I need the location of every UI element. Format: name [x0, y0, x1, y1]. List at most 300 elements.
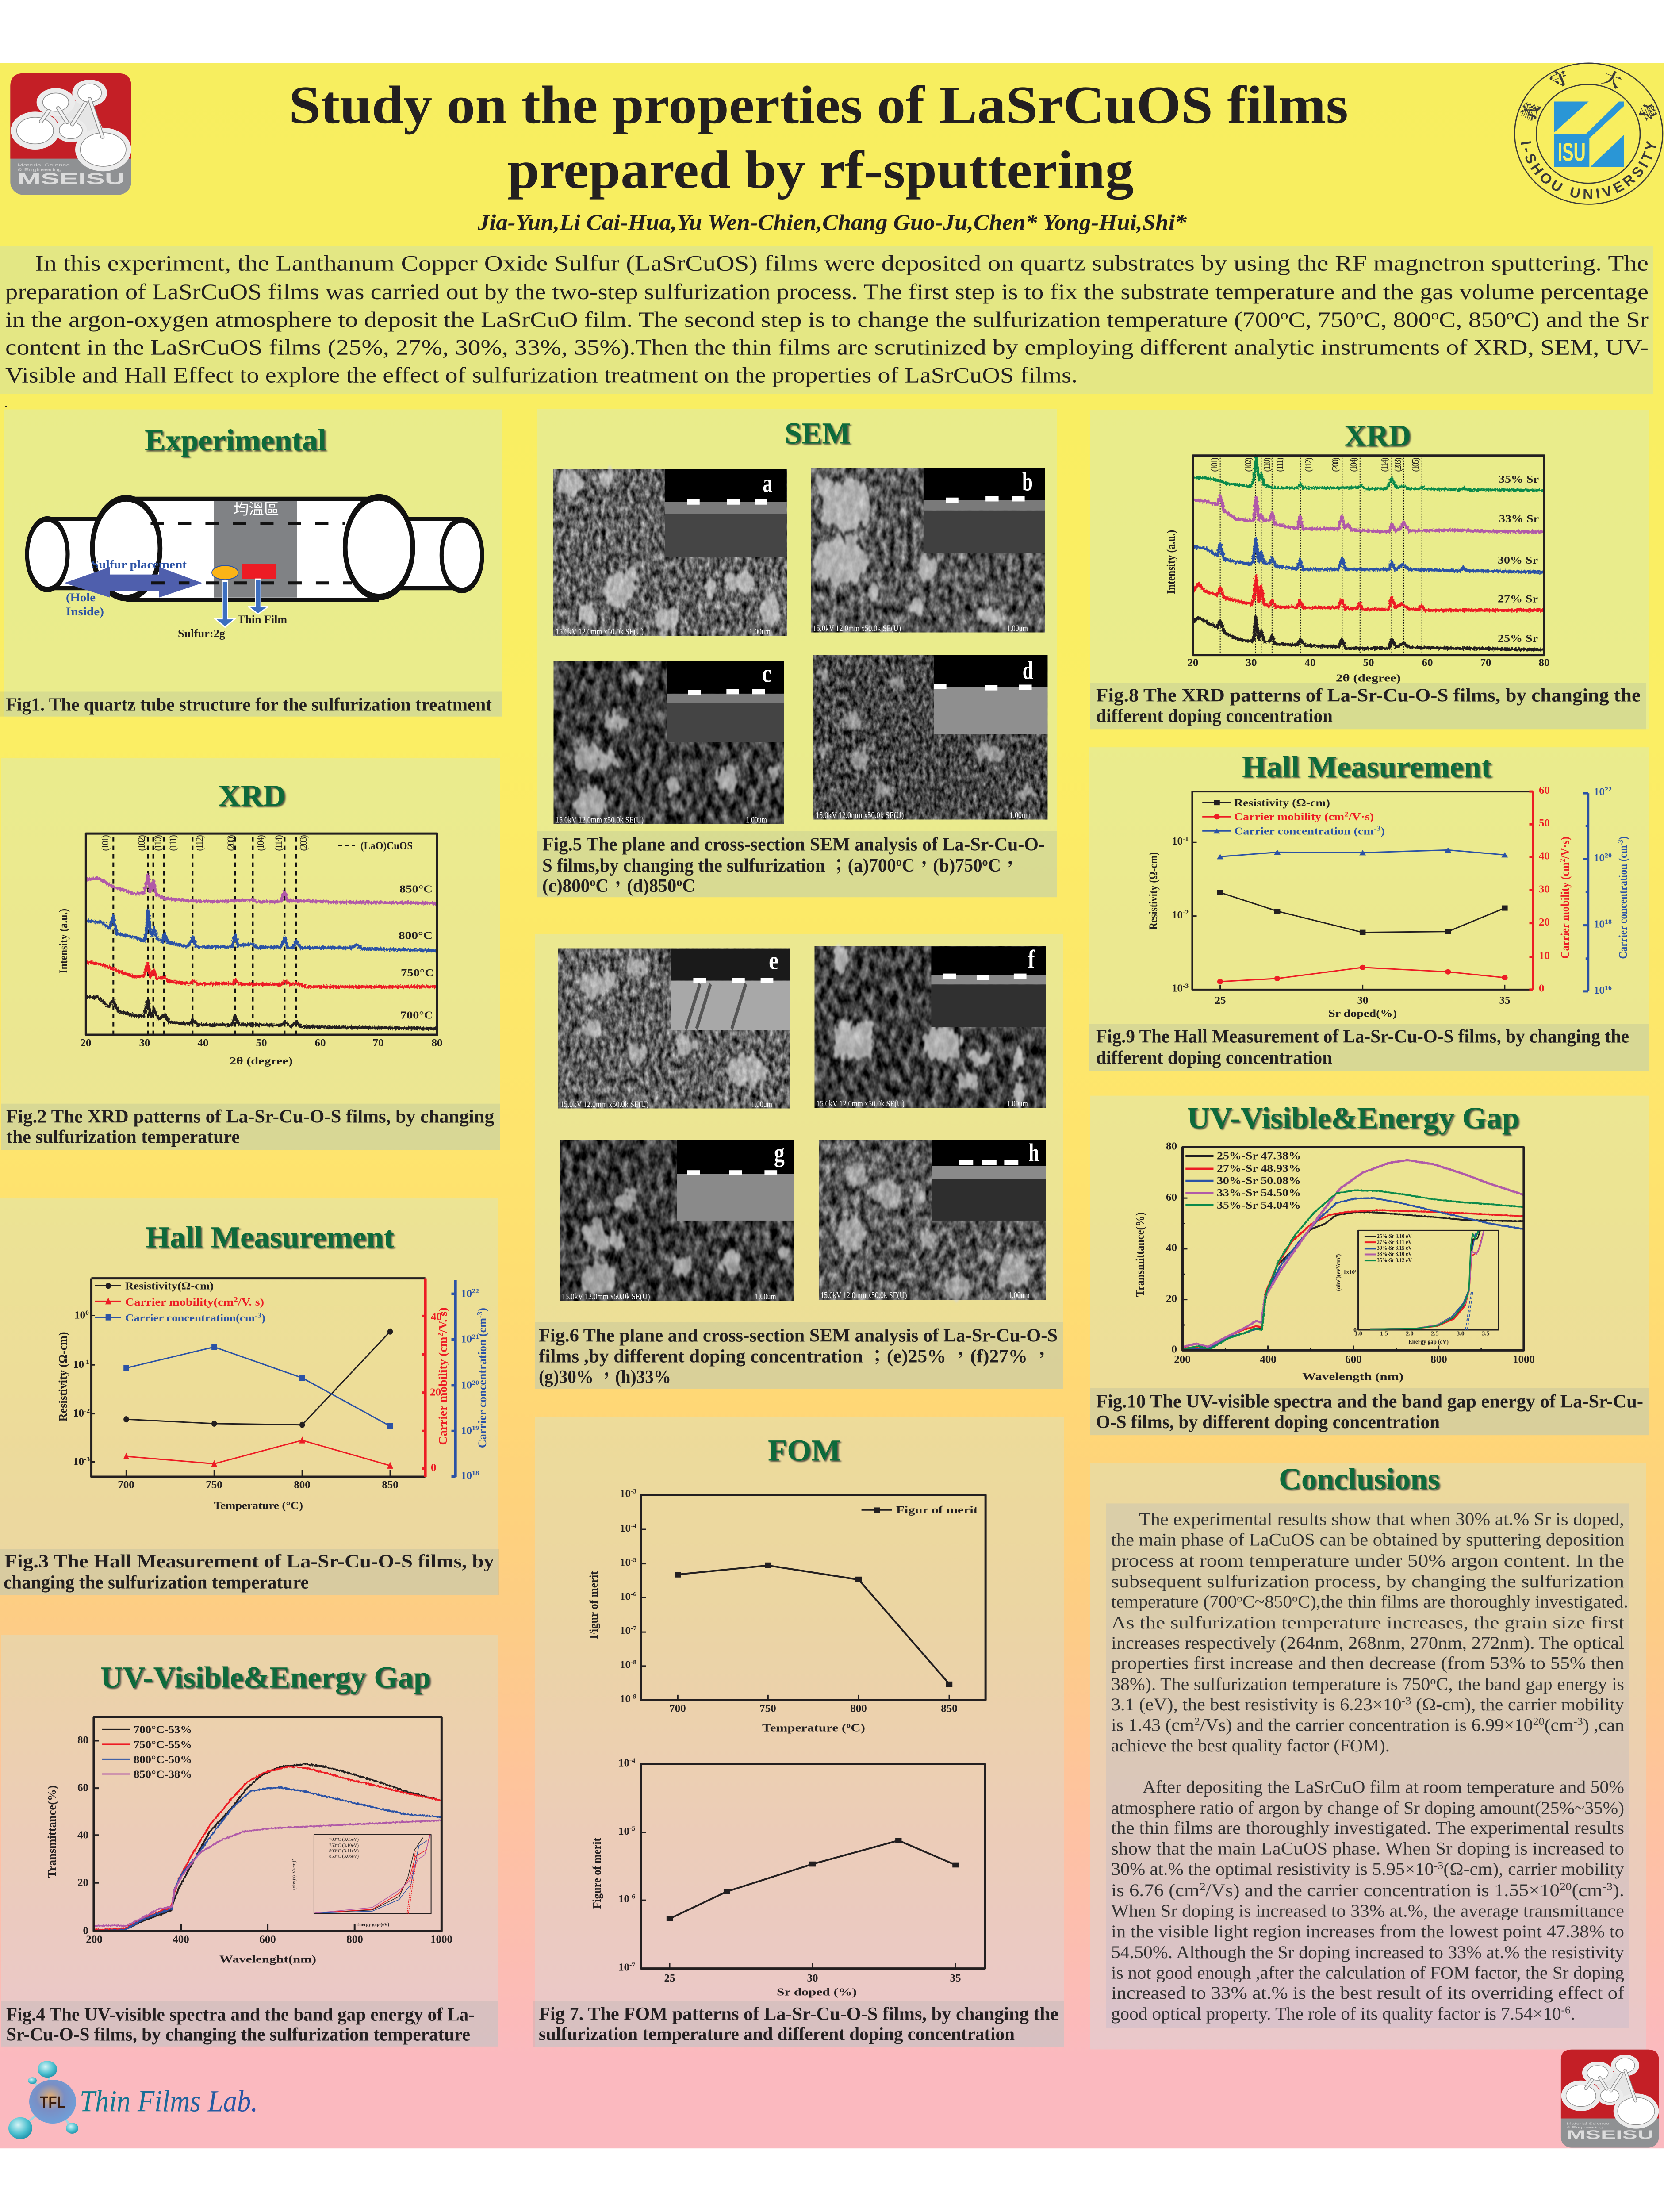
- chart: Hall by temperature: 1: [84, 1359, 89, 1366]
- chart: Hall by temperature: Resistivity(Ω-cm): [125, 1280, 214, 1292]
- chart: UV-visible by temperature: 750°C (3.10eV): [329, 1843, 359, 1848]
- chart: XRD patterns by temperature: (114): [273, 835, 284, 851]
- image: SEM b: [811, 468, 1045, 633]
- chart: Hall by temperature: 750: [206, 1479, 222, 1491]
- text block: conclusions body: 54.50%. Although the Sr doping increased to 33% at.% the resistivity: [1111, 1942, 1625, 1962]
- chart: Hall by temperature: 10: [461, 1288, 472, 1300]
- chart: Hall by doping: 10: [1172, 909, 1183, 921]
- caption: Fig 10: Fig.10 The UV-visible spectra and the band gap energy of La-Sr-Cu-: [1096, 1391, 1643, 1412]
- chart: XRD patterns by doping: (104): [1349, 457, 1359, 472]
- image: SEM h: h: [1028, 1139, 1039, 1167]
- diagram: quartz tube: Sulfur:2g: [178, 627, 225, 640]
- image: SEM e: e: [769, 947, 778, 975]
- chart: XRD patterns by doping: 20: [1188, 657, 1198, 668]
- chart: XRD patterns by doping: (111): [1275, 457, 1285, 472]
- chart: FOM by temperature: 10: [620, 1523, 631, 1534]
- image: SEM c: c: [762, 660, 771, 688]
- text block: conclusions body: 20: [1533, 1716, 1545, 1728]
- chart: Hall by doping: [1147, 784, 1629, 1019]
- chart: Hall by temperature: 850: [382, 1479, 399, 1491]
- text block: conclusions body: ) ,can: [1583, 1715, 1624, 1735]
- chart: FOM by temperature: 700: [669, 1703, 686, 1715]
- chart: Hall by temperature: 10: [461, 1379, 472, 1391]
- heading: Experimental: Experimental: [145, 423, 326, 457]
- chart: XRD patterns by doping: 33% Sr: [1499, 513, 1539, 525]
- text block: conclusions body: increases respectively (264nm, 268nm, 270nm, 272nm). The optical: [1111, 1633, 1624, 1653]
- image: SEM f: [815, 945, 1046, 1109]
- text block: conclusions body: the thin films are thoroughly investigated. The experimental results: [1111, 1818, 1624, 1838]
- chart: UV-visible by doping: 33%-Sr 54.50%: [1217, 1187, 1301, 1199]
- chart: UV-visible by doping: Energy gap (eV): [1408, 1338, 1449, 1345]
- chart: FOM by doping: 30: [807, 1973, 818, 1984]
- chart: Hall by temperature: 10: [74, 1310, 85, 1321]
- panel: FOM: [533, 1417, 1064, 2047]
- text block: conclusions body: o: [1292, 1592, 1298, 1604]
- logo: MSEISU bottom right: [1561, 2050, 1659, 2148]
- chart: XRD patterns by temperature: (101): [100, 835, 111, 851]
- chart: Hall by doping: /V·s): [1559, 837, 1572, 859]
- chart: Hall by doping: 35: [1499, 995, 1510, 1006]
- panel: abstract: C, 800: [1364, 307, 1431, 332]
- chart: UV-visible by doping: 27%-Sr 3.11 eV: [1377, 1239, 1412, 1245]
- chart: XRD patterns by temperature: Intensity (a.u.): [57, 909, 70, 974]
- image: SEM a: [553, 469, 787, 637]
- chart: FOM by doping: -4: [629, 1757, 635, 1764]
- panel: abstract: C, 850: [1439, 307, 1507, 332]
- caption: Fig 5: S films,by changing the sulfurization ；(a)700: [542, 856, 923, 876]
- chart: XRD patterns by temperature: 40: [198, 1037, 208, 1049]
- chart: XRD patterns by doping: (112): [1304, 457, 1314, 472]
- chart: XRD patterns by doping: 70: [1480, 657, 1491, 668]
- image: SEM f: 1.00um: [1007, 1098, 1028, 1109]
- text block: conclusions body: 30% at.% the optimal resistivity is 5.95×10: [1111, 1859, 1433, 1879]
- chart: Hall by doping: 30: [1539, 883, 1550, 895]
- caption: Fig 5: C: [682, 876, 695, 896]
- chart: Hall by doping: -2: [1183, 909, 1189, 916]
- chart: FOM by temperature: Figur of merit: [587, 1571, 600, 1639]
- chart: Hall by doping: 10: [1172, 836, 1183, 847]
- panel: UV-Visible temperature: [1, 1635, 498, 2047]
- text block: conclusions body: C, the band gap energy is: [1436, 1674, 1624, 1694]
- text block: conclusions body: -3: [1573, 1716, 1583, 1728]
- image: SEM h: [819, 1139, 1046, 1300]
- caption: Fig 9: Fig.9 The Hall Measurement of La-Sr-Cu-O-S films, by changing the: [1096, 1027, 1629, 1047]
- chart: Hall by temperature: 800: [294, 1479, 311, 1491]
- caption: Fig 6: films ,by different doping concentration ；(e)25% ，(f)27% ，: [539, 1346, 1051, 1367]
- text block: conclusions body: After depositing the LaSrCuO film at room temperature and 50%: [1143, 1777, 1624, 1797]
- text block: conclusions body: -3: [1603, 1881, 1613, 1893]
- caption: Fig 2: the sulfurization temperature: [6, 1127, 240, 1147]
- text block: conclusions body: subsequent sulfurization process, by changing the sulfurization: [1111, 1571, 1624, 1591]
- chart: FOM by temperature: -4: [631, 1522, 636, 1530]
- image: SEM c: 1.00um: [746, 814, 767, 825]
- chart: XRD patterns by doping: (102): [1244, 457, 1254, 472]
- chart: UV-visible by doping: 30%-Sr 3.15 eV: [1377, 1244, 1412, 1251]
- chart: XRD patterns by doping: 80: [1539, 657, 1549, 668]
- chart: UV-visible by temperature: Wavelenght(nm): [219, 1953, 316, 1965]
- caption: Fig 6: Fig.6 The plane and cross-section SEM analysis of La-Sr-Cu-O-S: [539, 1326, 1058, 1346]
- chart: FOM by temperature: -7: [631, 1624, 636, 1632]
- chart: UV-visible by doping: 25%-Sr 47.38%: [1217, 1150, 1301, 1162]
- chart: Hall by temperature: -3: [84, 1456, 90, 1463]
- text block: conclusions body: is 1.43 (cm: [1111, 1715, 1194, 1735]
- chart: Hall by temperature: 10: [73, 1408, 84, 1419]
- chart: Hall by doping: 25: [1215, 995, 1226, 1006]
- image: SEM d: 15.0kV 12.0mm x50.0k SE(U): [816, 810, 904, 820]
- panel: abstract: content in the LaSrCuOS films (25%, 27%, 30%, 33%, 35%).Then the thin films are scrutinized by employing different analytic instruments of XRD, SEM, UV-: [5, 335, 1649, 359]
- chart: Hall by doping: Carrier mobility (cm: [1559, 861, 1572, 959]
- chart: Hall by temperature: /V. s): [238, 1296, 264, 1308]
- caption: Fig 6: (g)30% ，(h)33%: [539, 1367, 671, 1387]
- image: SEM g: g: [774, 1139, 785, 1167]
- chart: XRD patterns by doping: (203): [1393, 457, 1403, 472]
- chart: XRD patterns by temperature: 80: [432, 1037, 442, 1049]
- image: SEM g: 15.0kV 12.0mm x50.0k SE(U): [562, 1291, 650, 1302]
- caption: Fig 7: Fig 7. The FOM patterns of La-Sr-Cu-O-S films, by changing the: [539, 2004, 1058, 2024]
- chart: XRD patterns by doping: (101): [1210, 457, 1219, 472]
- panel: abstract: In this experiment, the Lanthanum Copper Oxide Sulfur (LaSrCuOS) films were deposited on quartz substrates by using the RF magnetron sputtering. The: [35, 251, 1649, 275]
- panel: UV-Visible doping: [1090, 1096, 1649, 1435]
- chart: FOM by doping: -7: [629, 1961, 635, 1969]
- text block: conclusions body: o: [1237, 1592, 1242, 1604]
- caption: Fig 5: o: [676, 876, 682, 888]
- chart: XRD patterns by temperature: 850°C: [399, 883, 433, 895]
- image: SEM b: 15.0kV 12.0mm x50.0k SE(U): [813, 623, 901, 633]
- chart: Hall by doping: ): [1617, 837, 1629, 840]
- chart: Hall by temperature: 2: [436, 1333, 445, 1337]
- text block: conclusions body: (Ω-cm), the carrier mobility: [1411, 1694, 1625, 1714]
- chart: Hall by doping: 10: [1594, 918, 1605, 930]
- chart: Hall by doping: Resistivity (Ω-cm): [1234, 797, 1330, 809]
- logo: I-Shou University seal: 大: [1599, 63, 1626, 93]
- logo: I-Shou University seal: ISU: [1558, 138, 1586, 166]
- chart: UV-visible by doping: 2.0: [1406, 1330, 1414, 1336]
- chart: UV-visible by doping: 35%-Sr 3.12 eV: [1377, 1257, 1412, 1263]
- image: SEM h: 15.0kV 12.0mm x50.0k SE(U): [820, 1290, 907, 1300]
- image: SEM b: 1.00um: [1007, 623, 1028, 633]
- chart: XRD patterns by temperature: (203): [298, 835, 309, 851]
- chart: FOM by temperature: -8: [631, 1659, 636, 1666]
- caption: Fig 5: [537, 831, 1057, 897]
- chart: Hall by doping: 10: [1172, 983, 1183, 994]
- text block: conclusions body: 20: [1560, 1881, 1572, 1893]
- panel: abstract: Visible and Hall Effect to explore the effect of sulfurization treatment on the properties of LaSrCuOS films.: [5, 363, 1077, 387]
- chart: XRD patterns by temperature: (111): [168, 835, 178, 851]
- chart: Hall by temperature: 2: [234, 1295, 238, 1303]
- logo: MSEISU bottom right: MSEISU: [1567, 2128, 1654, 2142]
- caption: Fig 5: C，(d)850: [595, 876, 676, 896]
- caption: Fig 8: [1090, 683, 1646, 729]
- chart: XRD patterns by doping: 30% Sr: [1498, 554, 1538, 566]
- chart: Hall by doping: 50: [1539, 818, 1550, 829]
- chart: FOM by temperature: -3: [631, 1488, 636, 1495]
- text block: conclusions body: ).: [1613, 1880, 1624, 1900]
- text block: conclusions body: -6: [1561, 2004, 1571, 2016]
- chart: Hall by temperature: 21: [472, 1333, 479, 1340]
- chart: Hall by doping: Carrier concentration (cm: [1234, 826, 1358, 837]
- chart: FOM by temperature: -6: [631, 1590, 636, 1598]
- chart: XRD patterns by temperature: [57, 833, 442, 1067]
- chart: XRD patterns by temperature: 60: [315, 1037, 326, 1049]
- panel: SEM temperature: [537, 409, 1057, 897]
- chart: UV-visible by doping: 0: [1172, 1344, 1177, 1355]
- chart: UV-visible by temperature: 200: [86, 1934, 103, 1945]
- chart: XRD patterns by temperature: 700°C: [400, 1009, 433, 1021]
- caption: Fig 4: [1, 2001, 498, 2047]
- text block: conclusions body: properties first increase and then decrease (from 53% to 55% then: [1111, 1653, 1624, 1673]
- title: Study on the properties of LaSrCuOS films: [289, 76, 1348, 135]
- chart: FOM by doping: 25: [664, 1973, 675, 1984]
- chart: XRD patterns by temperature: 70: [373, 1037, 383, 1049]
- chart: UV-visible by temperature: 700°C (3.05eV): [329, 1837, 359, 1842]
- chart: XRD patterns by temperature: (102): [136, 835, 147, 851]
- chart: Hall by temperature: 0: [431, 1462, 436, 1474]
- chart: Hall by temperature: 20: [430, 1386, 441, 1398]
- chart: UV-visible by doping: 40: [1166, 1242, 1177, 1254]
- chart: FOM by doping: -5: [629, 1825, 635, 1832]
- chart: Hall by doping: 10: [1594, 786, 1605, 798]
- text block: conclusions body: As the sulfurization temperature increases, the grain size first: [1111, 1613, 1625, 1632]
- chart: UV-visible by temperature: 1000: [430, 1934, 452, 1945]
- chart: FOM by temperature: 10: [620, 1693, 631, 1705]
- chart: Hall by temperature: 10: [461, 1470, 472, 1482]
- text block: conclusions body: o: [1430, 1674, 1436, 1687]
- text block: conclusions body: 3.1 (eV), the best resistivity is 6.23×10: [1111, 1694, 1401, 1714]
- chart: FOM by temperature: 10: [620, 1591, 631, 1602]
- image: SEM c: [554, 660, 784, 825]
- chart: Hall by temperature: Carrier concentration(cm: [125, 1313, 247, 1324]
- caption: Fig 2: Fig.2 The XRD patterns of La-Sr-Cu-O-S films, by changing: [6, 1107, 495, 1127]
- caption: Fig 9: [1089, 1024, 1649, 1071]
- chart: UV-visible by doping: 0: [1353, 1326, 1357, 1333]
- chart: UV-visible by doping: 27%-Sr 48.93%: [1217, 1163, 1301, 1175]
- caption: Fig 5: C，: [988, 856, 1019, 876]
- chart: Hall by temperature: [57, 1279, 489, 1512]
- chart: FOM by doping: 10: [618, 1757, 629, 1769]
- chart: XRD patterns by doping: 25% Sr: [1498, 633, 1538, 645]
- chart: Hall by temperature: 10: [461, 1333, 472, 1345]
- chart: UV-visible by temperature: 750°C-55%: [134, 1739, 192, 1751]
- panel: abstract: C, 750: [1288, 307, 1356, 332]
- logo: Thin Films Lab: [8, 2061, 258, 2139]
- panel: XRD temperature: [1, 758, 500, 1150]
- chart: UV-visible by temperature: Transmittance(%): [46, 1785, 58, 1878]
- logo: MSEISU top left: Material Science: [17, 163, 70, 168]
- chart: Hall by temperature: ): [261, 1313, 265, 1324]
- panel: abstract: in the argon-oxygen atmosphere to deposit the LaSrCuO film. The second step is to change the sulfurization temperature (700: [5, 307, 1164, 332]
- caption: Fig 10: [1090, 1388, 1649, 1435]
- chart: Hall by temperature: Temperature (°C): [214, 1499, 303, 1512]
- image: SEM a: 1.00um: [749, 626, 771, 637]
- image: SEM h: 1.00um: [1008, 1290, 1030, 1300]
- panel: XRD doping: [1090, 410, 1649, 729]
- chart: UV-visible by temperature: 850°C-38%: [134, 1769, 192, 1780]
- text block: conclusions body: C),the thin films are thoroughly investigated.: [1298, 1592, 1628, 1611]
- chart: Hall by temperature: 19: [472, 1425, 479, 1432]
- chart: Hall by temperature: 40: [431, 1311, 442, 1323]
- chart: UV-visible by temperature: 400: [173, 1934, 189, 1945]
- chart: UV-visible by doping: Wavelength (nm): [1302, 1371, 1403, 1382]
- text block: conclusions body: is not good enough ,after the calculation of FOM factor, the Sr doping: [1111, 1962, 1624, 1982]
- panel: Hall doping: [1089, 747, 1649, 1071]
- text block: conclusions body: good optical property. The role of its quality factor is 7.54×10: [1111, 2004, 1571, 2024]
- caption: Fig 5: C，(b)750: [902, 856, 982, 876]
- chart: Hall by doping: /V·s): [1348, 811, 1374, 823]
- text block: conclusions body: When Sr doping is increased to 33% at.%, the average transmittance: [1111, 1901, 1624, 1920]
- chart: Hall by temperature: 18: [472, 1470, 479, 1477]
- chart: FOM by temperature: -9: [631, 1693, 636, 1700]
- logo: MSEISU bottom right: Material Science: [1567, 2122, 1610, 2126]
- chart: UV-visible by doping: 3.0: [1457, 1330, 1465, 1336]
- caption: Fig 2: [1, 1104, 500, 1150]
- chart: UV-visible by doping: 35%-Sr 54.04%: [1217, 1199, 1301, 1211]
- panel: abstract: o: [1356, 307, 1364, 323]
- text block: conclusions body: 2: [1200, 1881, 1206, 1893]
- heading: UV-Visible&Energy Gap: UV-Visible&Energy Gap: [100, 1661, 431, 1694]
- chart: Hall by doping: 16: [1605, 984, 1612, 992]
- chart: UV-visible by doping: 20: [1166, 1293, 1177, 1305]
- text block: conclusions body: (cm: [1572, 1880, 1603, 1900]
- text block: conclusions body: -3: [1434, 1859, 1443, 1872]
- inset: band gap: [314, 1835, 431, 1914]
- chart: FOM by temperature: 10: [620, 1625, 631, 1636]
- image: SEM g: [560, 1139, 794, 1302]
- chart: FOM by doping: 10: [618, 1825, 629, 1837]
- heading: XRD: XRD: [218, 779, 286, 813]
- caption: Fig 1: Fig1. The quartz tube structure for the sulfurization treatment: [6, 695, 492, 715]
- chart: XRD patterns by temperature: (LaO)CuOS: [360, 840, 413, 852]
- caption: Fig 4: Fig.4 The UV-visible spectra and the band gap energy of La-: [6, 2005, 475, 2025]
- logo: Thin Films Lab: Thin Films Lab.: [80, 2085, 258, 2118]
- logo: I-Shou University seal: I-SHOU UNIVERSITY: [1518, 140, 1660, 202]
- chart: UV-visible by doping: 400: [1260, 1354, 1277, 1365]
- chart: Hall by temperature: Resistivity (Ω-cm): [57, 1332, 69, 1421]
- chart: UV-visible by temperature: 800°C-50%: [134, 1754, 192, 1766]
- caption: Fig 5: o: [590, 876, 595, 888]
- chart: Hall by temperature: -3: [255, 1311, 261, 1319]
- chart: XRD patterns by doping: 2θ (degree): [1336, 672, 1401, 684]
- diagram: quartz tube: (Hole: [66, 591, 96, 604]
- text block: conclusions body: (Ω-cm), carrier mobility: [1443, 1859, 1625, 1879]
- chart: FOM by temperature: 750: [759, 1703, 776, 1715]
- chart: XRD patterns by doping: 27% Sr: [1498, 593, 1538, 605]
- caption: Fig 3: changing the sulfurization temperature: [4, 1573, 309, 1593]
- panel: Hall temperature: [0, 1198, 499, 1595]
- chart: Hall by doping: 22: [1605, 786, 1612, 793]
- chart: FOM by temperature: 850: [941, 1703, 958, 1715]
- chart: UV-visible by doping: 1000: [1513, 1354, 1535, 1365]
- image: SEM c: 15.0kV 12.0mm x50.0k SE(U): [556, 814, 644, 825]
- diagram: quartz tube: 均溫區: [234, 497, 279, 519]
- chart: XRD patterns by doping: (114): [1380, 457, 1390, 472]
- chart: XRD patterns by temperature: 20: [81, 1037, 91, 1049]
- chart: Hall by doping: 10: [1594, 985, 1605, 996]
- logo: I-Shou University seal: 守: [1545, 63, 1572, 93]
- chart: Hall by temperature: ): [476, 1308, 489, 1312]
- chart: Hall by temperature: 22: [472, 1288, 479, 1295]
- caption: Fig 9: different doping concentration: [1096, 1048, 1332, 1068]
- chart: Hall by temperature: -2: [84, 1407, 90, 1415]
- chart: FOM by doping: 10: [618, 1962, 629, 1973]
- chart: XRD patterns by doping: 30: [1246, 657, 1257, 668]
- heading: Hall Measurement: Hall Measurement: [1242, 750, 1492, 783]
- panel: Experimental: [0, 410, 502, 717]
- chart: Hall by doping: 10: [1594, 853, 1605, 864]
- chart: FOM by doping: Figure of merit: [590, 1838, 603, 1909]
- authors: Jia-Yun,Li Cai-Hua,Yu Wen-Chien,Chang Guo-Ju,Chen* Yong-Hui,Shi*: [477, 210, 1187, 234]
- chart: FOM by doping: -6: [629, 1893, 635, 1900]
- image: SEM b: b: [1022, 468, 1033, 496]
- heading: UV-Visible&Energy Gap: UV-Visible&Energy Gap: [1187, 1102, 1519, 1135]
- chart: UV-visible by doping: 1.0: [1354, 1330, 1362, 1336]
- chart: XRD patterns by doping: 40: [1305, 657, 1315, 668]
- caption: Fig 5: o: [982, 855, 988, 868]
- chart: Hall by temperature: 700: [118, 1479, 134, 1491]
- caption: Fig 8: different doping concentration: [1096, 706, 1333, 726]
- chart: XRD patterns by doping: (105): [1411, 457, 1421, 472]
- text block: conclusions body: 38%). The sulfurization temperature is 750: [1111, 1674, 1430, 1694]
- chart: UV-visible by temperature: 850°C (3.06eV): [329, 1854, 359, 1859]
- logo: I-Shou University seal: [1513, 63, 1664, 204]
- caption: Fig 5: Fig.5 The plane and cross-section SEM analysis of La-Sr-Cu-O-: [542, 834, 1045, 855]
- logo: MSEISU top left: [10, 73, 131, 195]
- panel: abstract: o: [1281, 307, 1288, 323]
- image: SEM a: 15.0kV 12.0mm x50.0k SE(U): [556, 626, 644, 637]
- chart: FOM by temperature: Figur of merit: [896, 1504, 978, 1516]
- chart: UV-visible by temperature: 800°C (3.11eV): [329, 1848, 359, 1854]
- chart: XRD patterns by doping: (110): [1262, 457, 1272, 472]
- chart: UV-visible by doping: 3.5: [1482, 1330, 1490, 1336]
- chart: FOM by temperature: -5: [631, 1556, 636, 1564]
- chart: UV-visible by doping: 30%-Sr 50.08%: [1217, 1175, 1301, 1187]
- chart: XRD patterns by doping: 60: [1422, 657, 1433, 668]
- chart: Hall by temperature: 0: [85, 1309, 89, 1317]
- chart: XRD patterns by temperature: 800°C: [399, 929, 433, 941]
- chart: UV-visible by temperature: 0: [83, 1925, 88, 1936]
- chart: Hall by doping: Sr doped(%): [1328, 1007, 1397, 1019]
- logo: Thin Films Lab: TFL: [40, 2093, 65, 2112]
- image: SEM e: 1.00um: [751, 1099, 772, 1109]
- chart: UV-visible by doping: 1x10¹⁰: [1343, 1269, 1359, 1275]
- inset: band gap: [1358, 1230, 1499, 1330]
- chart: Hall by temperature: /V. s): [437, 1307, 449, 1333]
- panel: abstract: o: [1431, 307, 1439, 323]
- text block: conclusions body: show that the main LaCuOS phase. When Sr doping is increased to: [1111, 1838, 1624, 1858]
- chart: Hall by doping: 20: [1539, 917, 1550, 928]
- text block: conclusions body: /Vs) and the carrier concentration is 6.99×10: [1200, 1715, 1533, 1735]
- text block: conclusions body: atmosphere ratio of argon by change of Sr doping amount(25%~35%): [1111, 1798, 1624, 1818]
- chart: FOM by temperature: 10: [620, 1659, 631, 1671]
- text block: conclusions body: the main phase of LaCuOS can be obtained by sputtering deposition: [1111, 1530, 1624, 1549]
- chart: XRD patterns by doping: [1165, 456, 1549, 684]
- chart: Hall by temperature: 10: [73, 1359, 84, 1371]
- chart: UV-visible by doping: [1134, 1141, 1535, 1382]
- chart: Hall by doping: 60: [1539, 784, 1550, 796]
- image: SEM g: 1.00um: [755, 1291, 776, 1302]
- chart: UV-visible by temperature: 600: [259, 1934, 276, 1945]
- image: SEM e: [558, 947, 790, 1109]
- chart: FOM by doping: Sr doped (%): [777, 1986, 857, 1998]
- panel: Conclusions: [1090, 1463, 1646, 2049]
- text block: conclusions body: is 6.76 (cm: [1111, 1880, 1194, 1900]
- chart: UV-visible by temperature: 80: [77, 1735, 88, 1746]
- chart: Hall by doping: -3: [1374, 824, 1381, 833]
- caption: Fig 5: o: [896, 855, 902, 868]
- chart: Hall by doping: -1: [1183, 835, 1189, 842]
- text block: conclusions body: increased to 33% at.% is the best result of its overriding effect of: [1111, 1983, 1624, 2003]
- chart: UV-visible by temperature: 20: [77, 1877, 88, 1889]
- chart: XRD patterns by doping: Intensity (a.u.): [1165, 530, 1177, 594]
